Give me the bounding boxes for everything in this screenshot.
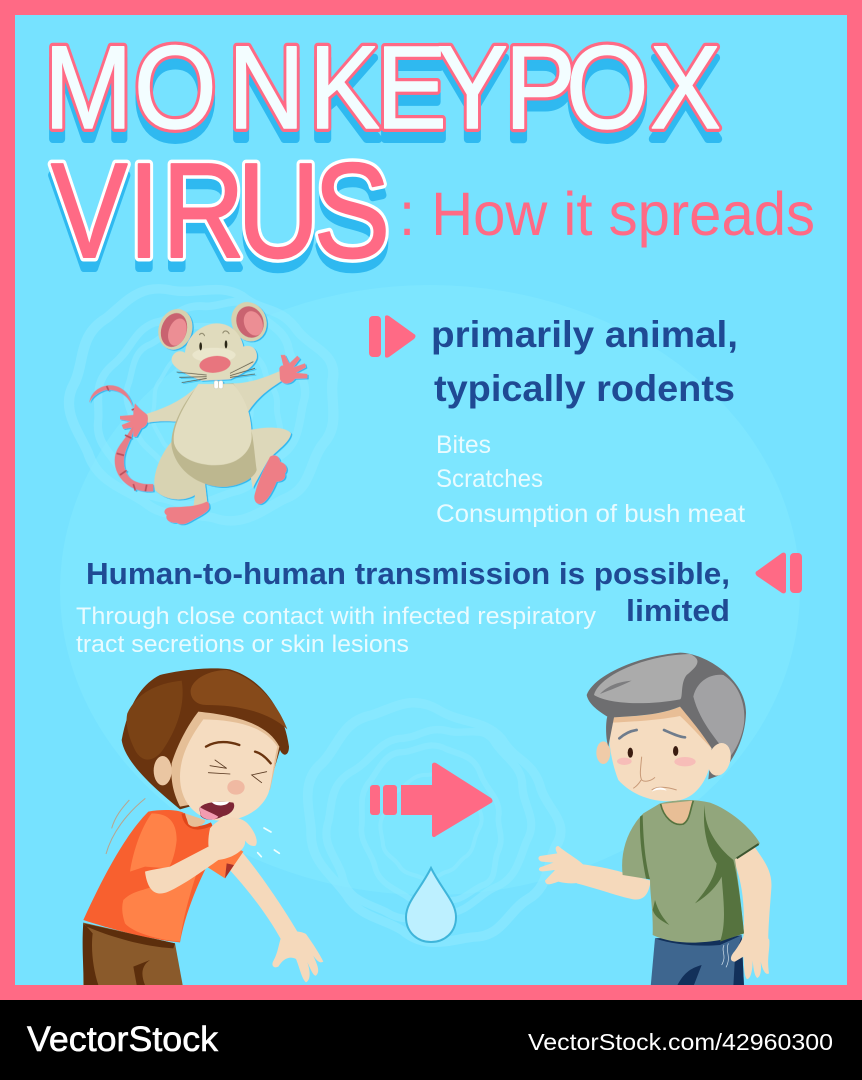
whiskers	[177, 362, 255, 383]
eyes	[199, 340, 227, 350]
text: close contact	[76, 603, 596, 658]
nose and mouth	[633, 757, 677, 790]
footer url: VectorStock.com/42960300	[528, 1029, 833, 1055]
nose	[199, 354, 231, 374]
hair side	[127, 681, 183, 760]
neck	[185, 813, 205, 827]
list: animal transmission: Scratches	[436, 465, 543, 493]
face details	[206, 742, 271, 783]
left leg and thigh	[154, 440, 207, 507]
sick older man	[538, 653, 771, 987]
cough droplets	[258, 828, 279, 857]
text: close contact: tract secretions or skin lesions	[76, 631, 409, 658]
title: MONKEYPOX: MONKEYPOX	[44, 21, 721, 153]
right leg	[248, 428, 291, 488]
heading: human-to-human	[86, 556, 730, 628]
swirl behind rat	[40, 251, 364, 557]
belly	[174, 384, 252, 465]
teeth	[214, 381, 223, 389]
shirt	[622, 800, 760, 943]
tail	[89, 385, 153, 492]
heading: human-to-human: Human-to-human transmission is possible,	[86, 556, 730, 591]
right ear	[225, 297, 273, 347]
hair	[587, 653, 746, 779]
hair back and head	[122, 668, 289, 809]
near arm	[733, 845, 771, 938]
hairline shade	[613, 707, 712, 748]
list: animal transmission	[436, 431, 745, 528]
far arm	[577, 864, 651, 899]
left ear	[596, 741, 610, 764]
left ear	[153, 305, 198, 354]
arms	[146, 371, 284, 423]
water droplet	[406, 868, 456, 942]
jeans	[651, 935, 744, 987]
muzzle highlight	[192, 348, 236, 362]
heading: animal: primarily animal,	[431, 314, 738, 355]
hair fringe	[191, 670, 287, 729]
far hand	[272, 932, 323, 982]
eyebrows	[619, 730, 685, 738]
heading: animal: typically rodents	[434, 368, 735, 409]
list: animal transmission: Consumption of bush meat	[436, 500, 745, 528]
title: VIRUS: VIRUS	[51, 146, 390, 297]
motion lines	[106, 798, 145, 854]
text: close contact: Through close contact with infected respiratory	[76, 603, 596, 630]
footer brand: VectorStock	[27, 1020, 219, 1059]
pocket wrinkles	[722, 943, 728, 967]
title: MONKEYPOX: MONKEYPOX	[44, 32, 721, 164]
list: animal transmission: Bites	[436, 431, 491, 459]
heading: human-to-human: limited	[626, 593, 730, 628]
nose	[227, 780, 245, 795]
shirt	[83, 810, 217, 942]
head	[172, 323, 257, 381]
fist	[208, 817, 257, 860]
near arm	[145, 847, 218, 894]
play icon	[369, 315, 416, 358]
subtitle: : How it spreads	[399, 180, 815, 248]
eyes	[628, 746, 678, 758]
shirt sleeve far	[207, 842, 243, 878]
ear	[154, 756, 172, 785]
face shade	[171, 712, 279, 807]
large pale circle	[60, 285, 800, 895]
rewind icon	[756, 553, 802, 593]
far hand	[538, 846, 585, 884]
pants	[83, 923, 183, 985]
right ear	[704, 740, 734, 778]
brows	[199, 331, 229, 336]
title: VIRUS: VIRUS	[51, 135, 390, 286]
heading: animal	[431, 314, 738, 409]
body shade	[171, 383, 257, 487]
head skin	[609, 707, 712, 801]
title: VIRUS: VIRUS	[51, 135, 390, 286]
arrow icon	[370, 763, 492, 837]
lip highlight	[652, 788, 667, 792]
feet	[164, 455, 287, 524]
footer bar	[0, 1000, 862, 1080]
hands	[120, 355, 307, 437]
face	[180, 719, 277, 821]
near hand	[731, 934, 769, 979]
coughing boy	[83, 668, 323, 985]
title: MONKEYPOX: MONKEYPOX	[44, 21, 721, 153]
rat illustration	[89, 297, 307, 524]
swirl behind arrow	[263, 658, 598, 990]
mouth	[199, 802, 234, 820]
far arm	[227, 852, 298, 940]
cheeks	[617, 757, 696, 766]
